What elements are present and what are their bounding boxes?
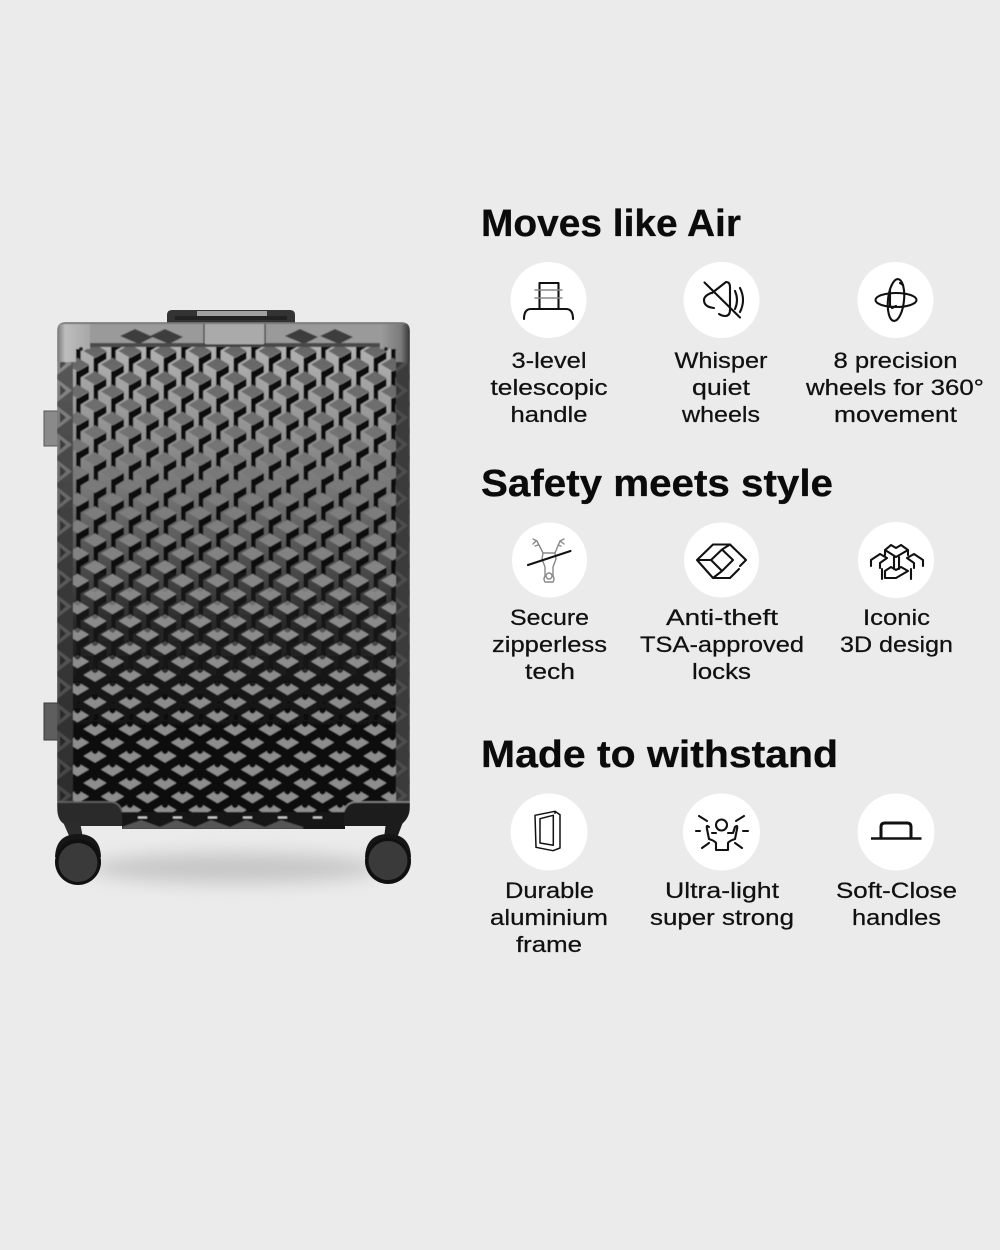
right wheel	[365, 822, 411, 884]
label: zipperless	[492, 632, 607, 657]
side latches	[44, 411, 58, 740]
feature: whisper quiet wheels	[674, 262, 768, 427]
icon: cubes	[858, 522, 934, 598]
icon: telescopic handle	[510, 262, 586, 338]
left wheel	[55, 822, 101, 885]
bottom rail	[57, 802, 410, 830]
heading: Made to withstand: Made to withstand	[481, 734, 838, 776]
label: wheels for 360°	[805, 375, 984, 400]
label: wheels	[681, 402, 760, 427]
icon: strong person	[683, 794, 760, 870]
icon: rotation axes	[858, 262, 934, 338]
label: Secure	[510, 605, 589, 630]
label: Ultra-light	[665, 878, 779, 903]
icon: frame	[510, 794, 588, 870]
feature: TSA locks	[640, 522, 804, 684]
heading: Moves like Air: Moves like Air	[481, 203, 741, 245]
label: movement	[834, 402, 957, 427]
icon: hexagon lock	[684, 522, 759, 598]
label: Durable	[505, 878, 594, 903]
suitcase body	[57, 322, 410, 830]
feature: ultra-light	[650, 794, 794, 930]
icon: muted speaker	[684, 262, 760, 338]
feature: telescopic handle	[490, 262, 608, 427]
feature: 360 wheels	[805, 262, 984, 427]
heading: Safety meets style: Safety meets style	[481, 463, 833, 505]
feature: 3D design	[840, 522, 953, 657]
label: 3D design	[840, 632, 953, 657]
top frame	[57, 322, 410, 362]
label: handle	[510, 402, 588, 427]
label: Soft-Close	[836, 878, 957, 903]
label: super strong	[650, 905, 794, 930]
top carry handle	[167, 310, 295, 323]
floor shadow	[90, 853, 380, 883]
label: quiet	[692, 375, 750, 400]
suitcase illustration	[44, 310, 411, 885]
label: frame	[516, 932, 582, 957]
ribbed side frames	[57, 345, 410, 810]
label: tech	[525, 659, 575, 684]
label: aluminium	[490, 905, 608, 930]
feature: soft-close handles	[836, 794, 957, 930]
feature: aluminium frame	[490, 794, 608, 957]
label: telescopic	[490, 375, 608, 400]
feature: zipperless	[492, 522, 607, 684]
label: 3-level	[512, 348, 586, 373]
label: handles	[852, 905, 941, 930]
label: TSA-approved	[640, 632, 804, 657]
label: Whisper	[674, 348, 768, 373]
label: locks	[692, 659, 751, 684]
label: Iconic	[863, 605, 930, 630]
label: 8 precision	[834, 348, 958, 373]
icon: handle	[858, 794, 934, 870]
icon: crossed zipper	[512, 522, 587, 598]
label: Anti-theft	[666, 605, 778, 630]
